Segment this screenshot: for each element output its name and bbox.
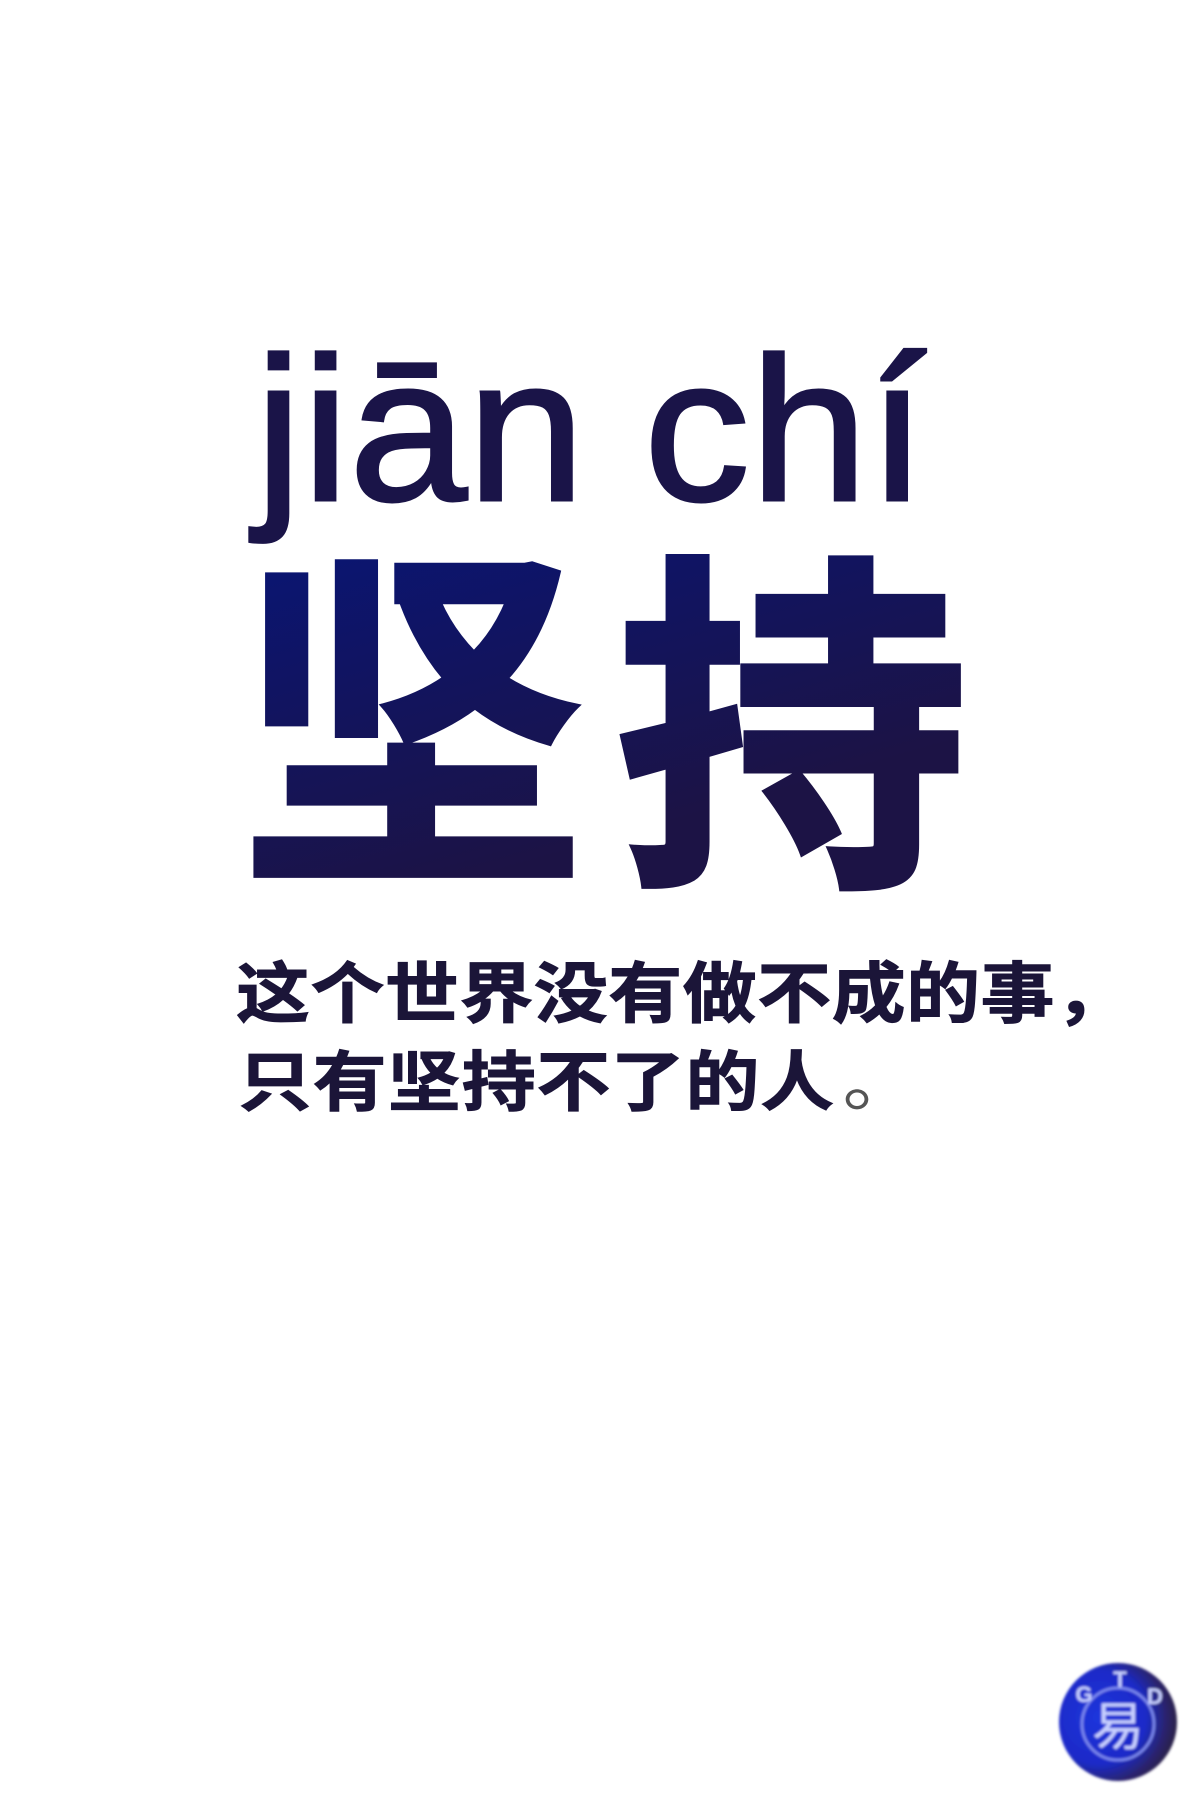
main title characters: 坚 [235,533,589,928]
tagline text [236,956,1129,1119]
tagline text: 这个世界没有做不成的事， [236,956,1129,1031]
icon: GTD logo badge [1059,1663,1177,1781]
pinyin heading: jiān chí [249,315,927,544]
main title characters: 持 [615,538,969,933]
icon: GTD logo badge: T [1113,1667,1127,1692]
icon: GTD logo badge: G [1075,1682,1093,1707]
main title characters [235,533,969,933]
tagline text: 只有坚持不了的人。 [238,1046,917,1119]
icon: GTD logo badge: 易 [1092,1699,1144,1757]
icon: GTD logo badge: D [1147,1684,1163,1709]
